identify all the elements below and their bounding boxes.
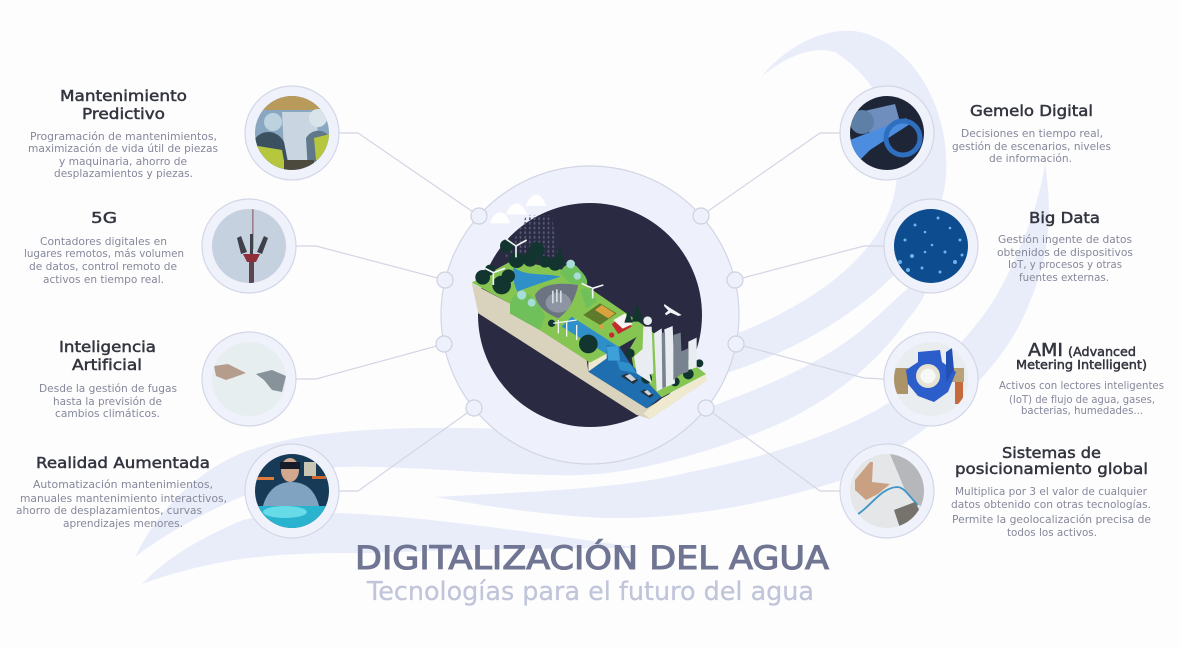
- icon: airplane: [664, 304, 682, 316]
- subtitle: Tecnologías para el futuro del agua: [366, 577, 814, 607]
- panel: Sistemas de posicionamiento global: [840, 444, 1151, 539]
- description: Gestión ingente de datos: [998, 234, 1132, 246]
- photo: human and robot hands: [202, 332, 296, 426]
- description: fuentes externas.: [1019, 272, 1109, 284]
- photo: telecom tower: [202, 199, 296, 293]
- hills: [510, 264, 597, 330]
- heading: Gemelo Digital: [970, 102, 1093, 120]
- description: aprendizajes menores.: [63, 518, 183, 530]
- panel: AMI: [884, 332, 1164, 426]
- description: activos en tiempo real.: [43, 274, 164, 286]
- description: Decisiones en tiempo real,: [961, 128, 1103, 140]
- cliff side: [472, 283, 707, 419]
- trees: [475, 239, 703, 386]
- heading: Artificial: [72, 356, 142, 374]
- farmhouse: [612, 316, 632, 334]
- city land: [630, 325, 706, 397]
- panel: 5G: [24, 199, 296, 293]
- heading: [59, 338, 156, 374]
- description: hasta la previsión de: [53, 396, 162, 408]
- photo: digital twin turbine: [840, 86, 934, 180]
- description: maximización de vida útil de piezas: [28, 143, 218, 155]
- panel: Gemelo Digital: [840, 86, 1111, 180]
- heading: [1016, 340, 1147, 372]
- description: (IoT) de flujo de agua, gases,: [1009, 394, 1155, 406]
- isometric water landscape illustration: [472, 195, 707, 419]
- panel: Big Data: [884, 199, 1133, 293]
- field rows: [583, 303, 617, 325]
- heading: (Advanced: [1068, 344, 1136, 359]
- city towers: [634, 316, 697, 392]
- panel: Realidad Aumentada: [16, 444, 339, 538]
- description: obtenidos de dispositivos: [997, 247, 1133, 259]
- description: de datos, control remoto de: [29, 261, 177, 273]
- description: Automatización mantenimientos,: [33, 479, 213, 491]
- connector lines: [296, 133, 884, 491]
- description: de información.: [989, 153, 1072, 165]
- description: Multiplica por 3 el valor de cualquier: [955, 486, 1148, 498]
- description: cambios climáticos.: [55, 408, 160, 420]
- heading: 5G: [91, 209, 117, 227]
- panel: Inteligencia Artificial: [39, 332, 296, 426]
- icon: clouds: [490, 195, 547, 223]
- description: Programación de mantenimientos,: [30, 131, 217, 143]
- description: [999, 380, 1164, 417]
- heading: [955, 444, 1148, 478]
- description: desplazamientos y piezas.: [54, 168, 193, 180]
- description: gestión de escenarios, niveles: [952, 141, 1111, 153]
- heading: [60, 87, 187, 123]
- photo: hand and GPS route: [840, 444, 934, 538]
- title: DIGITALIZACIÓN DEL AGUA: [355, 538, 829, 577]
- photo: data circuit: [884, 199, 978, 293]
- heading: Mantenimiento: [60, 87, 187, 105]
- heading: Inteligencia: [59, 338, 156, 356]
- description: manuales mantenimiento interactivos,: [20, 493, 227, 505]
- description: Contadores digitales en: [40, 236, 167, 248]
- wind turbines: [482, 238, 603, 340]
- description: lugares remotos, más volumen: [24, 248, 184, 260]
- description: bacterias, humedades...: [1021, 405, 1143, 417]
- connector nodes on ring: [436, 208, 744, 416]
- land left: [472, 260, 643, 363]
- panel: Mantenimiento Predictivo: [28, 86, 339, 180]
- heading: Sistemas de: [1002, 444, 1101, 462]
- photo: smart water meter: [884, 332, 978, 426]
- photo: person with VR headset: [245, 444, 339, 538]
- heading: Realidad Aumentada: [36, 454, 210, 472]
- dark central disc: [478, 203, 702, 427]
- heading: Predictivo: [82, 105, 165, 123]
- heading: AMI: [1028, 340, 1063, 361]
- river and lake: [513, 267, 561, 292]
- description: [951, 486, 1151, 539]
- heading: Big Data: [1029, 209, 1100, 227]
- description: ahorro de desplazamientos, curvas: [16, 505, 202, 517]
- rain dots: [505, 215, 558, 257]
- description: [16, 479, 227, 530]
- description: IoT, y procesos y otras: [1008, 259, 1122, 271]
- heading: posicionamiento global: [955, 460, 1148, 478]
- heading: Metering Intelligent): [1016, 357, 1147, 372]
- ships: [621, 373, 654, 398]
- background water swooshes: [135, 31, 1049, 584]
- photo: maintenance workers: [245, 86, 339, 180]
- central hub ring: [441, 166, 739, 464]
- description: datos obtenido con otras tecnologías.: [951, 499, 1151, 511]
- description: Permite la geolocalización precisa de: [952, 514, 1151, 526]
- description: [28, 131, 218, 180]
- description: [24, 236, 184, 286]
- description: todos los activos.: [1007, 527, 1097, 539]
- description: [39, 383, 177, 420]
- dam: [535, 284, 578, 318]
- description: Activos con lectores inteligentes: [999, 380, 1164, 392]
- description: [952, 128, 1111, 165]
- description: y maquinaria, ahorro de: [59, 156, 187, 168]
- description: Desde la gestión de fugas: [39, 383, 177, 395]
- description: [997, 234, 1133, 284]
